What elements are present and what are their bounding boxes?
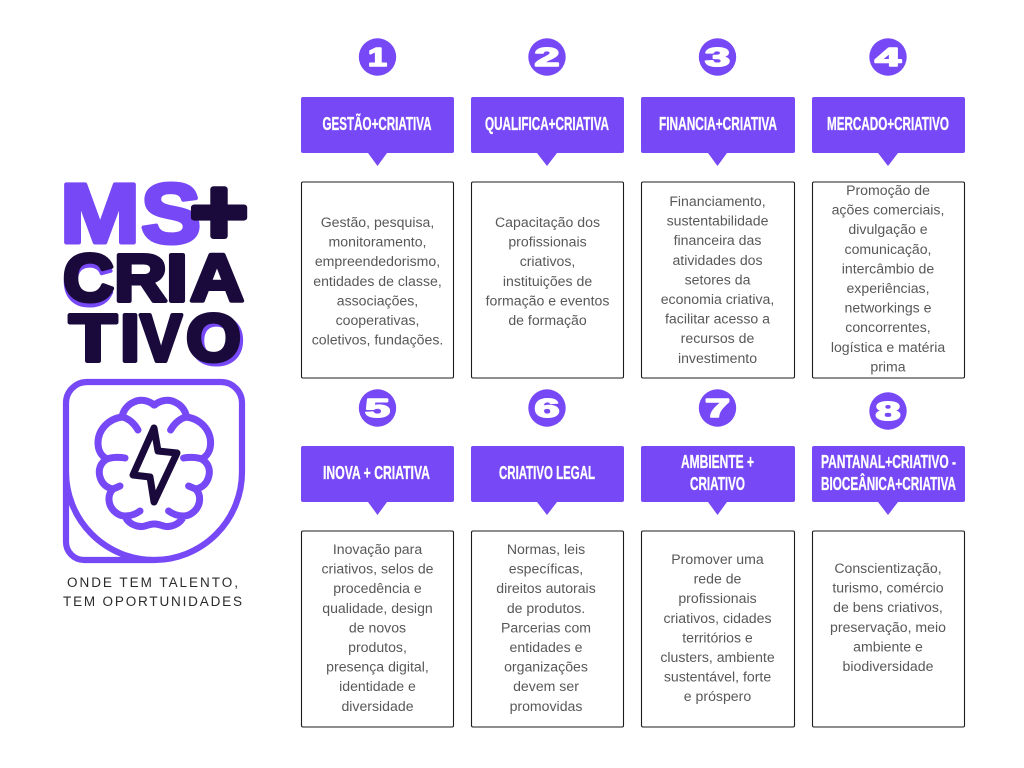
card 6: direitos autorais xyxy=(496,580,596,596)
header 7: CRIATIVO xyxy=(690,473,745,494)
header 5 xyxy=(301,446,454,515)
number badge 1: 1 xyxy=(368,42,387,72)
number badge 8: 8 xyxy=(876,396,900,426)
card 1: entidades de classe, xyxy=(313,273,442,289)
card 3: economia criativa, xyxy=(661,291,774,307)
number badge 3: 3 xyxy=(705,42,730,72)
number badge 6 xyxy=(528,389,566,427)
number badge 2 xyxy=(528,38,566,76)
card 2: formação e eventos xyxy=(486,292,609,308)
wordmark line: TIVO: T xyxy=(69,301,117,376)
card 4: comunicação, xyxy=(845,241,931,257)
wordmark shadow: purple offset under C and O: O xyxy=(189,304,244,379)
card 4: prima xyxy=(870,358,906,374)
card 8: ambiente e xyxy=(853,638,923,654)
wordmark line: CRIA: I xyxy=(166,241,188,316)
card 2: instituições de xyxy=(503,273,592,289)
column 6: Criativo Legal xyxy=(471,389,624,727)
column 2: Qualifica+Criativa xyxy=(471,38,624,378)
card 7: e próspero xyxy=(684,688,751,704)
number badge 8 xyxy=(869,392,907,430)
card 4 xyxy=(812,182,964,378)
header 4: MERCADO+CRIATIVO xyxy=(827,113,949,134)
tagline: ONDE TEM TALENTO, xyxy=(67,575,238,590)
wordmark line: MS: S xyxy=(141,166,201,260)
tagline: TEM OPORTUNIDADES xyxy=(63,594,242,609)
card 8: turismo, comércio xyxy=(832,580,944,596)
wordmark line: TIVO: O xyxy=(186,301,241,376)
card 8: Conscientização, xyxy=(834,560,942,576)
wordmark shadow: purple offset under C and O xyxy=(63,245,244,379)
card 2: de formação xyxy=(508,312,587,328)
card 1: coletivos, fundações. xyxy=(312,332,443,348)
card 4: logística e matéria xyxy=(831,339,945,355)
wordmark plus sign: + xyxy=(190,161,248,263)
header 6: CRIATIVO LEGAL xyxy=(499,462,595,483)
card 5: de novos xyxy=(349,619,406,635)
header 6 xyxy=(471,446,624,515)
card 8: biodiversidade xyxy=(843,658,934,674)
wordmark shadow: purple offset under C and O: C xyxy=(63,245,113,320)
card 6: devem ser xyxy=(513,678,579,694)
card 2 xyxy=(472,182,624,378)
card 3: atividades dos xyxy=(672,252,763,268)
card 5 xyxy=(302,531,454,727)
card 7: rede de xyxy=(694,571,742,587)
card 2: profissionais xyxy=(508,234,587,250)
header 1 xyxy=(301,97,454,166)
wordmark line: CRIA: C xyxy=(63,241,114,316)
card 6: Normas, leis xyxy=(507,541,585,557)
card 6: Parcerias com xyxy=(501,619,591,635)
header 2 xyxy=(471,97,624,166)
wordmark line: MS: M xyxy=(60,166,140,260)
header 2: QUALIFICA+CRIATIVA xyxy=(485,113,609,134)
card 4: concorrentes, xyxy=(845,319,931,335)
number badge 4: 4 xyxy=(875,42,902,72)
card 3: recursos de xyxy=(681,330,754,346)
card 1: Gestão, pesquisa, xyxy=(321,214,434,230)
card 1: empreendedorismo, xyxy=(315,253,440,269)
column 7: Ambiente + Criativo xyxy=(641,389,795,727)
number badge 4 xyxy=(869,38,907,76)
card 5: identidade e xyxy=(339,678,416,694)
wordmark line: CRIA: A xyxy=(190,241,244,316)
card 5: presença digital, xyxy=(326,659,429,675)
card 6: promovidas xyxy=(510,698,582,714)
card 4: networkings e xyxy=(845,300,932,316)
card 3 xyxy=(642,182,794,378)
number badge 7: 7 xyxy=(705,393,730,423)
card 5: criativos, selos de xyxy=(321,561,434,577)
number badge 2: 2 xyxy=(534,42,560,72)
column 1: Gestão+Criativa xyxy=(301,38,454,378)
card 5: qualidade, design xyxy=(322,600,433,616)
card 3: investimento xyxy=(678,350,757,366)
header 3: FINANCIA+CRIATIVA xyxy=(659,113,777,134)
card 3: sustentabilidade xyxy=(667,213,769,229)
number badge 1 xyxy=(359,38,396,76)
icon: shield with brain and lightning bolt xyxy=(66,382,242,560)
card 8: de bens criativos, xyxy=(833,599,943,615)
card 1: cooperativas, xyxy=(336,312,419,328)
card 7: Promover uma xyxy=(671,551,764,567)
header 4 xyxy=(812,97,965,166)
card 3: setores da xyxy=(685,271,751,287)
card 6: específicas, xyxy=(509,561,583,577)
number badge 5 xyxy=(359,389,396,427)
card 8 xyxy=(812,531,964,727)
card 4: Promoção de xyxy=(846,182,930,198)
card 7: clusters, ambiente xyxy=(660,649,775,665)
card 5: Inovação para xyxy=(333,541,422,557)
card 7: territórios e xyxy=(682,629,753,645)
card 5: diversidade xyxy=(341,698,414,714)
card 7: sustentável, forte xyxy=(664,669,771,685)
header 7 xyxy=(641,446,795,515)
card 1: monitoramento, xyxy=(329,234,426,250)
header 7: AMBIENTE + xyxy=(681,451,754,472)
card 1: associações, xyxy=(337,292,418,308)
number badge 6: 6 xyxy=(534,393,560,423)
card 5: procedência e xyxy=(333,580,422,596)
number badge 5: 5 xyxy=(365,393,390,423)
brain outline xyxy=(98,400,211,527)
column 3: Financia+Criativa xyxy=(641,38,795,378)
card 4: experiências, xyxy=(846,280,930,296)
card 4: intercâmbio de xyxy=(842,260,934,276)
header 1: GESTÃO+CRIATIVA xyxy=(322,113,432,134)
card 2: criativos, xyxy=(520,253,575,269)
card 3: facilitar acesso a xyxy=(665,311,770,327)
column 8: Pantanal+Criativo - Bioceânica+Criativa xyxy=(812,392,965,727)
card 7 xyxy=(642,531,794,727)
number badge 3 xyxy=(699,38,736,76)
card 3: financeira das xyxy=(674,232,761,248)
number badge 7 xyxy=(699,389,736,427)
card 6: entidades e xyxy=(510,639,583,655)
card 7: criativos, cidades xyxy=(663,610,772,626)
shield outline xyxy=(66,382,242,560)
card 4: divulgação e xyxy=(848,221,928,237)
card 2: Capacitação dos xyxy=(495,214,600,230)
tagline xyxy=(63,575,242,609)
card 8: preservação, meio xyxy=(830,619,946,635)
lightning bolt xyxy=(133,428,177,502)
column 5: Inova + Criativa xyxy=(301,389,454,727)
header 8: PANTANAL+CRIATIVO - xyxy=(821,451,956,472)
card 7: profissionais xyxy=(678,590,757,606)
card 6: organizações xyxy=(504,659,588,675)
card 1 xyxy=(302,182,454,378)
card 6: de produtos. xyxy=(507,600,585,616)
card 5: produtos, xyxy=(348,639,407,655)
card 3: Financiamento, xyxy=(669,193,766,209)
logo: MS+ Criativo wordmark xyxy=(60,161,248,379)
header 8 xyxy=(812,446,965,515)
column 4: Mercado+Criativo xyxy=(812,38,965,378)
wordmark line: CRIA: R xyxy=(114,241,167,316)
wordmark line: TIVO: V xyxy=(140,301,182,376)
wordmark line: TIVO: I xyxy=(120,301,140,376)
header 5: INOVA + CRIATIVA xyxy=(323,462,430,483)
header 3 xyxy=(641,97,795,166)
card 4: ações comerciais, xyxy=(832,202,944,218)
card 6 xyxy=(472,531,624,727)
